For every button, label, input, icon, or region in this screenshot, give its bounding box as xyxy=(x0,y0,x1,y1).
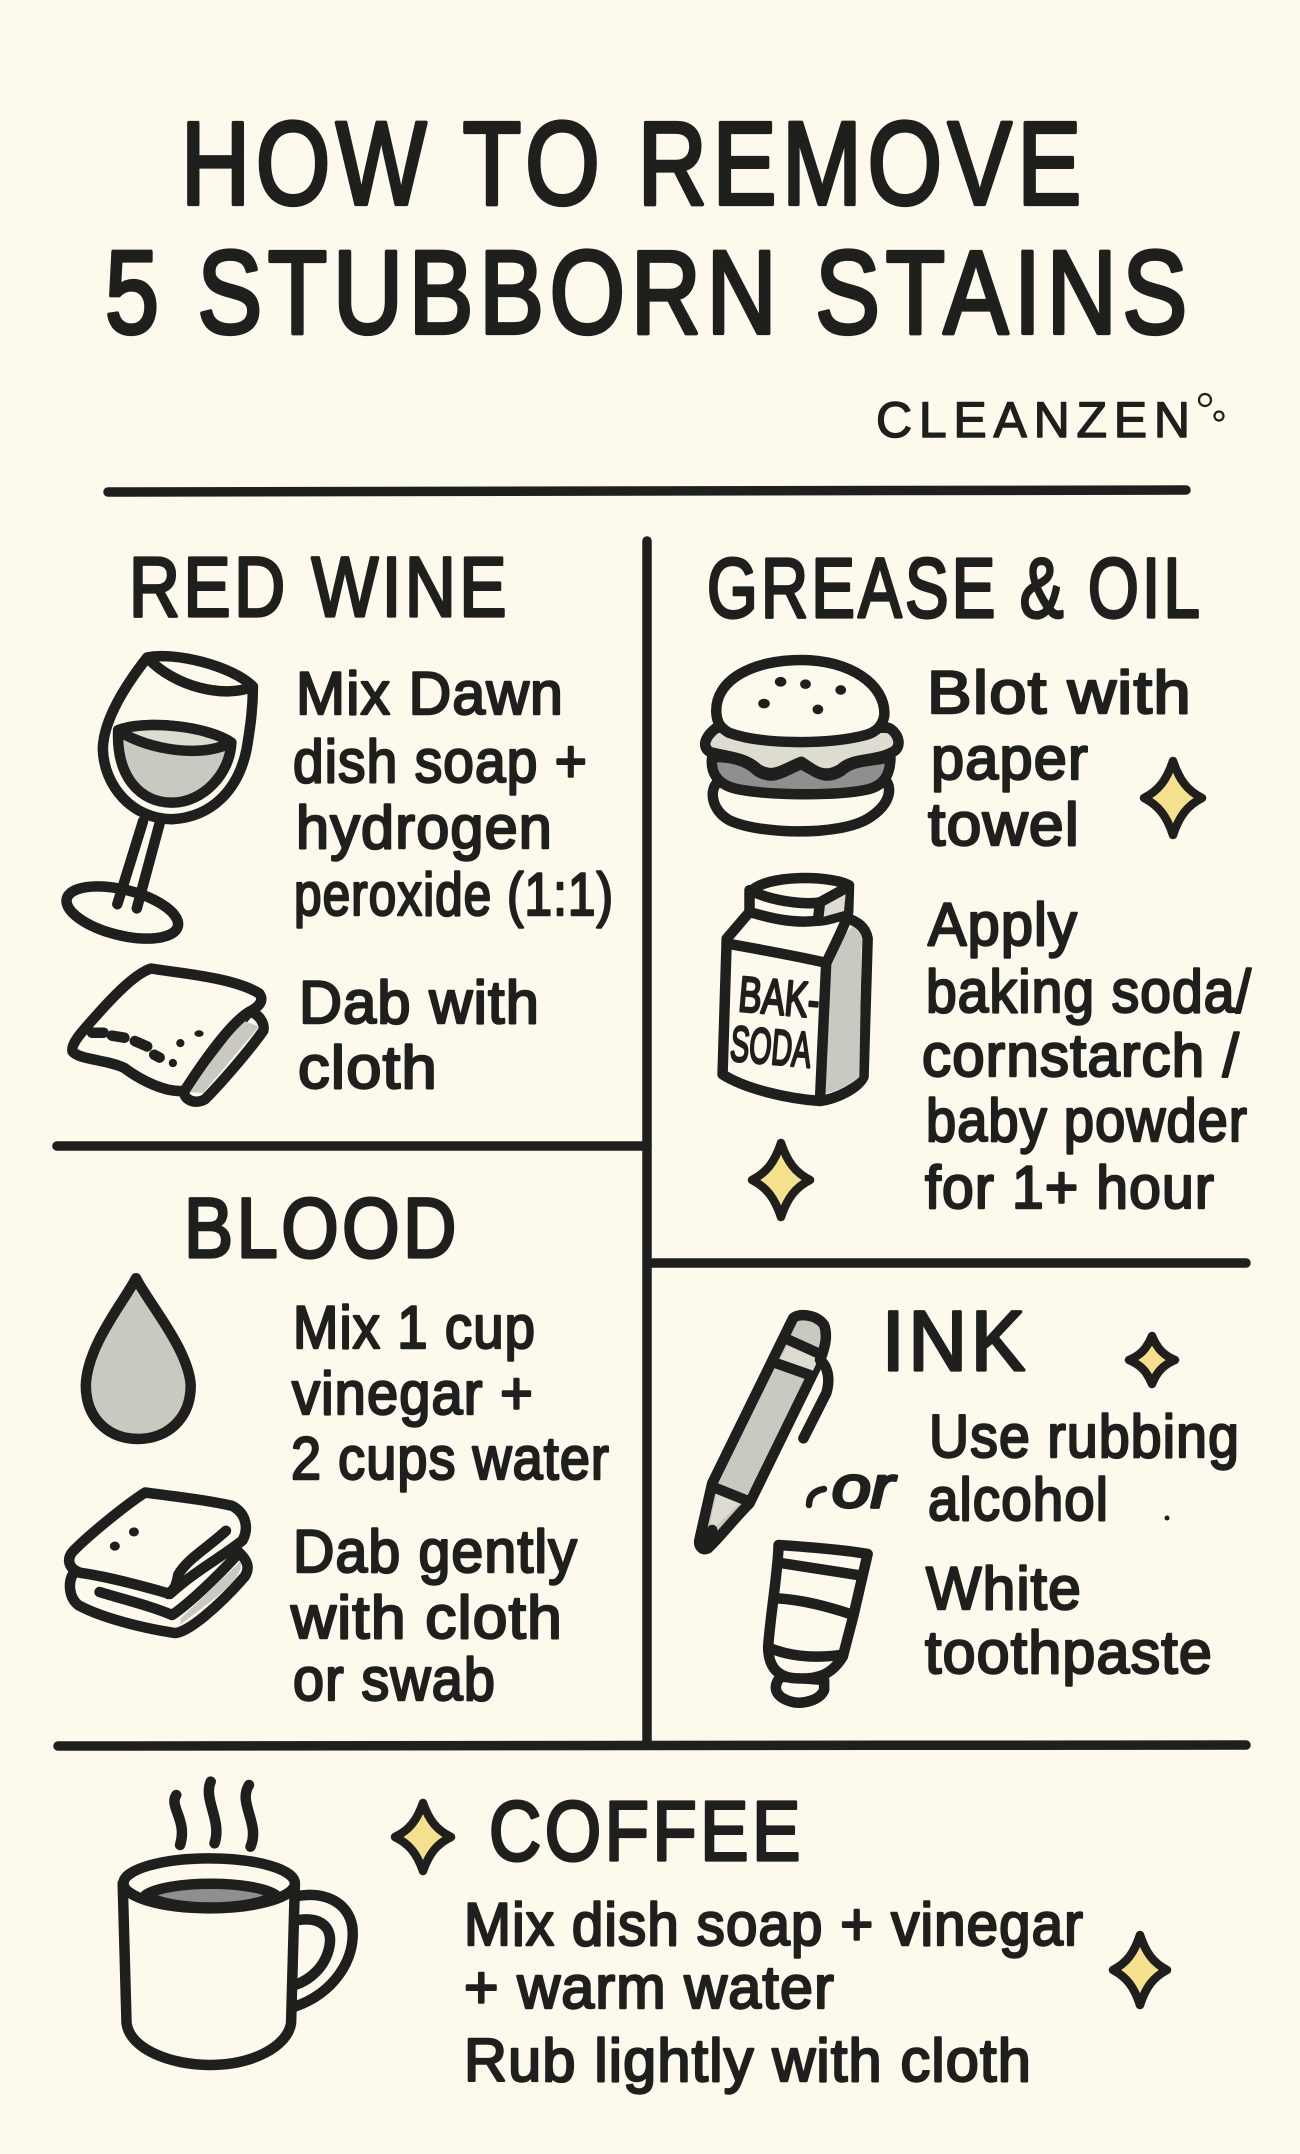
instruction: mix vinegar and water: 2 cups water xyxy=(291,1425,610,1492)
heading: coffee: COFFEE xyxy=(489,1784,804,1878)
panel: grease and oil xyxy=(705,541,1252,1221)
icon: coffee mug with steam xyxy=(123,1782,353,2065)
icon: toothpaste tube xyxy=(768,1545,868,1703)
label: or: or xyxy=(832,1455,897,1520)
instruction: apply powder: for 1+ hour xyxy=(925,1154,1215,1221)
label: BAK-SODA: BAK- xyxy=(736,966,822,1029)
brand logo: CLEANZEN: CLEANZEN xyxy=(876,392,1190,448)
instruction: blot with paper towel xyxy=(927,659,1192,858)
icon: folded cloth xyxy=(72,968,264,1102)
instruction: dab gently xyxy=(290,1518,578,1713)
instruction: blot with paper towel: Blot with xyxy=(927,659,1192,726)
instruction: apply powder: Apply xyxy=(928,891,1078,958)
instruction: apply powder: baby powder xyxy=(926,1087,1248,1154)
icon: sparkle xyxy=(395,1803,451,1871)
instruction: dab with cloth: cloth xyxy=(298,1034,438,1101)
instruction: rubbing alcohol: Use rubbing xyxy=(929,1403,1240,1470)
instruction: white toothpaste: toothpaste xyxy=(925,1619,1213,1686)
icon: sparkle xyxy=(752,1143,810,1217)
instruction: mix vinegar and water: Mix 1 cup xyxy=(293,1294,536,1361)
icon: sparkle xyxy=(1113,1935,1167,2005)
panel: ink xyxy=(699,1294,1240,1703)
instruction: mix soap and peroxide: dish soap + xyxy=(293,728,588,795)
label: BAK-SODA xyxy=(728,966,822,1079)
instruction: dab gently: or swab xyxy=(293,1646,496,1713)
instruction: white toothpaste: White xyxy=(926,1555,1082,1622)
heading: ink: INK xyxy=(882,1294,1029,1388)
instruction: apply powder: cornstarch / xyxy=(922,1022,1240,1089)
icon: stacked towels xyxy=(69,1493,248,1633)
panel: red wine xyxy=(61,540,614,1102)
instruction: coffee steps: + warm water xyxy=(464,1954,835,2021)
instruction: white toothpaste xyxy=(925,1555,1213,1686)
instruction: dab with cloth xyxy=(298,969,540,1101)
instruction: dab gently: Dab gently xyxy=(293,1518,578,1585)
panel: blood xyxy=(69,1181,610,1713)
instruction: blot with paper towel: paper xyxy=(931,725,1089,792)
label: BAK-SODA: SODA xyxy=(728,1016,814,1078)
panel: coffee xyxy=(123,1782,1167,2094)
instruction: dab with cloth: Dab with xyxy=(299,969,540,1036)
instruction: dab gently: with cloth xyxy=(290,1584,563,1651)
instruction: blot with paper towel: towel xyxy=(928,791,1080,858)
icon: pen xyxy=(699,1315,828,1549)
icon: sparkle xyxy=(1129,1336,1175,1384)
instruction: coffee steps: Mix dish soap + vinegar xyxy=(464,1891,1084,1958)
instruction: mix soap and peroxide: Mix Dawn xyxy=(296,660,564,727)
instruction: rubbing alcohol: alcohol xyxy=(928,1466,1109,1533)
instruction: coffee steps xyxy=(464,1891,1084,2094)
instruction: mix vinegar and water xyxy=(291,1294,610,1492)
icon: burger xyxy=(705,660,899,831)
icon: wine glass xyxy=(61,656,253,948)
icon: sparkle xyxy=(1144,761,1202,835)
heading: blood: BLOOD xyxy=(184,1181,460,1275)
instruction: rubbing alcohol xyxy=(928,1403,1240,1533)
instruction: apply powder xyxy=(922,891,1252,1221)
instruction: mix soap and peroxide: peroxide (1:1) xyxy=(294,861,614,928)
title: HOW TO REMOVE xyxy=(181,98,1087,230)
label: or xyxy=(809,1455,897,1520)
instruction: coffee steps: Rub lightly with cloth xyxy=(464,2027,1032,2094)
instruction: mix vinegar and water: vinegar + xyxy=(292,1360,534,1427)
icon: baking soda box xyxy=(723,878,868,1101)
icon: blood drop xyxy=(86,1278,191,1439)
instruction: apply powder: baking soda/ xyxy=(926,958,1252,1025)
instruction: mix soap and peroxide xyxy=(293,660,614,928)
title xyxy=(105,98,1193,359)
instruction: mix soap and peroxide: hydrogen xyxy=(296,794,553,861)
heading: red wine: RED WINE xyxy=(129,540,510,634)
